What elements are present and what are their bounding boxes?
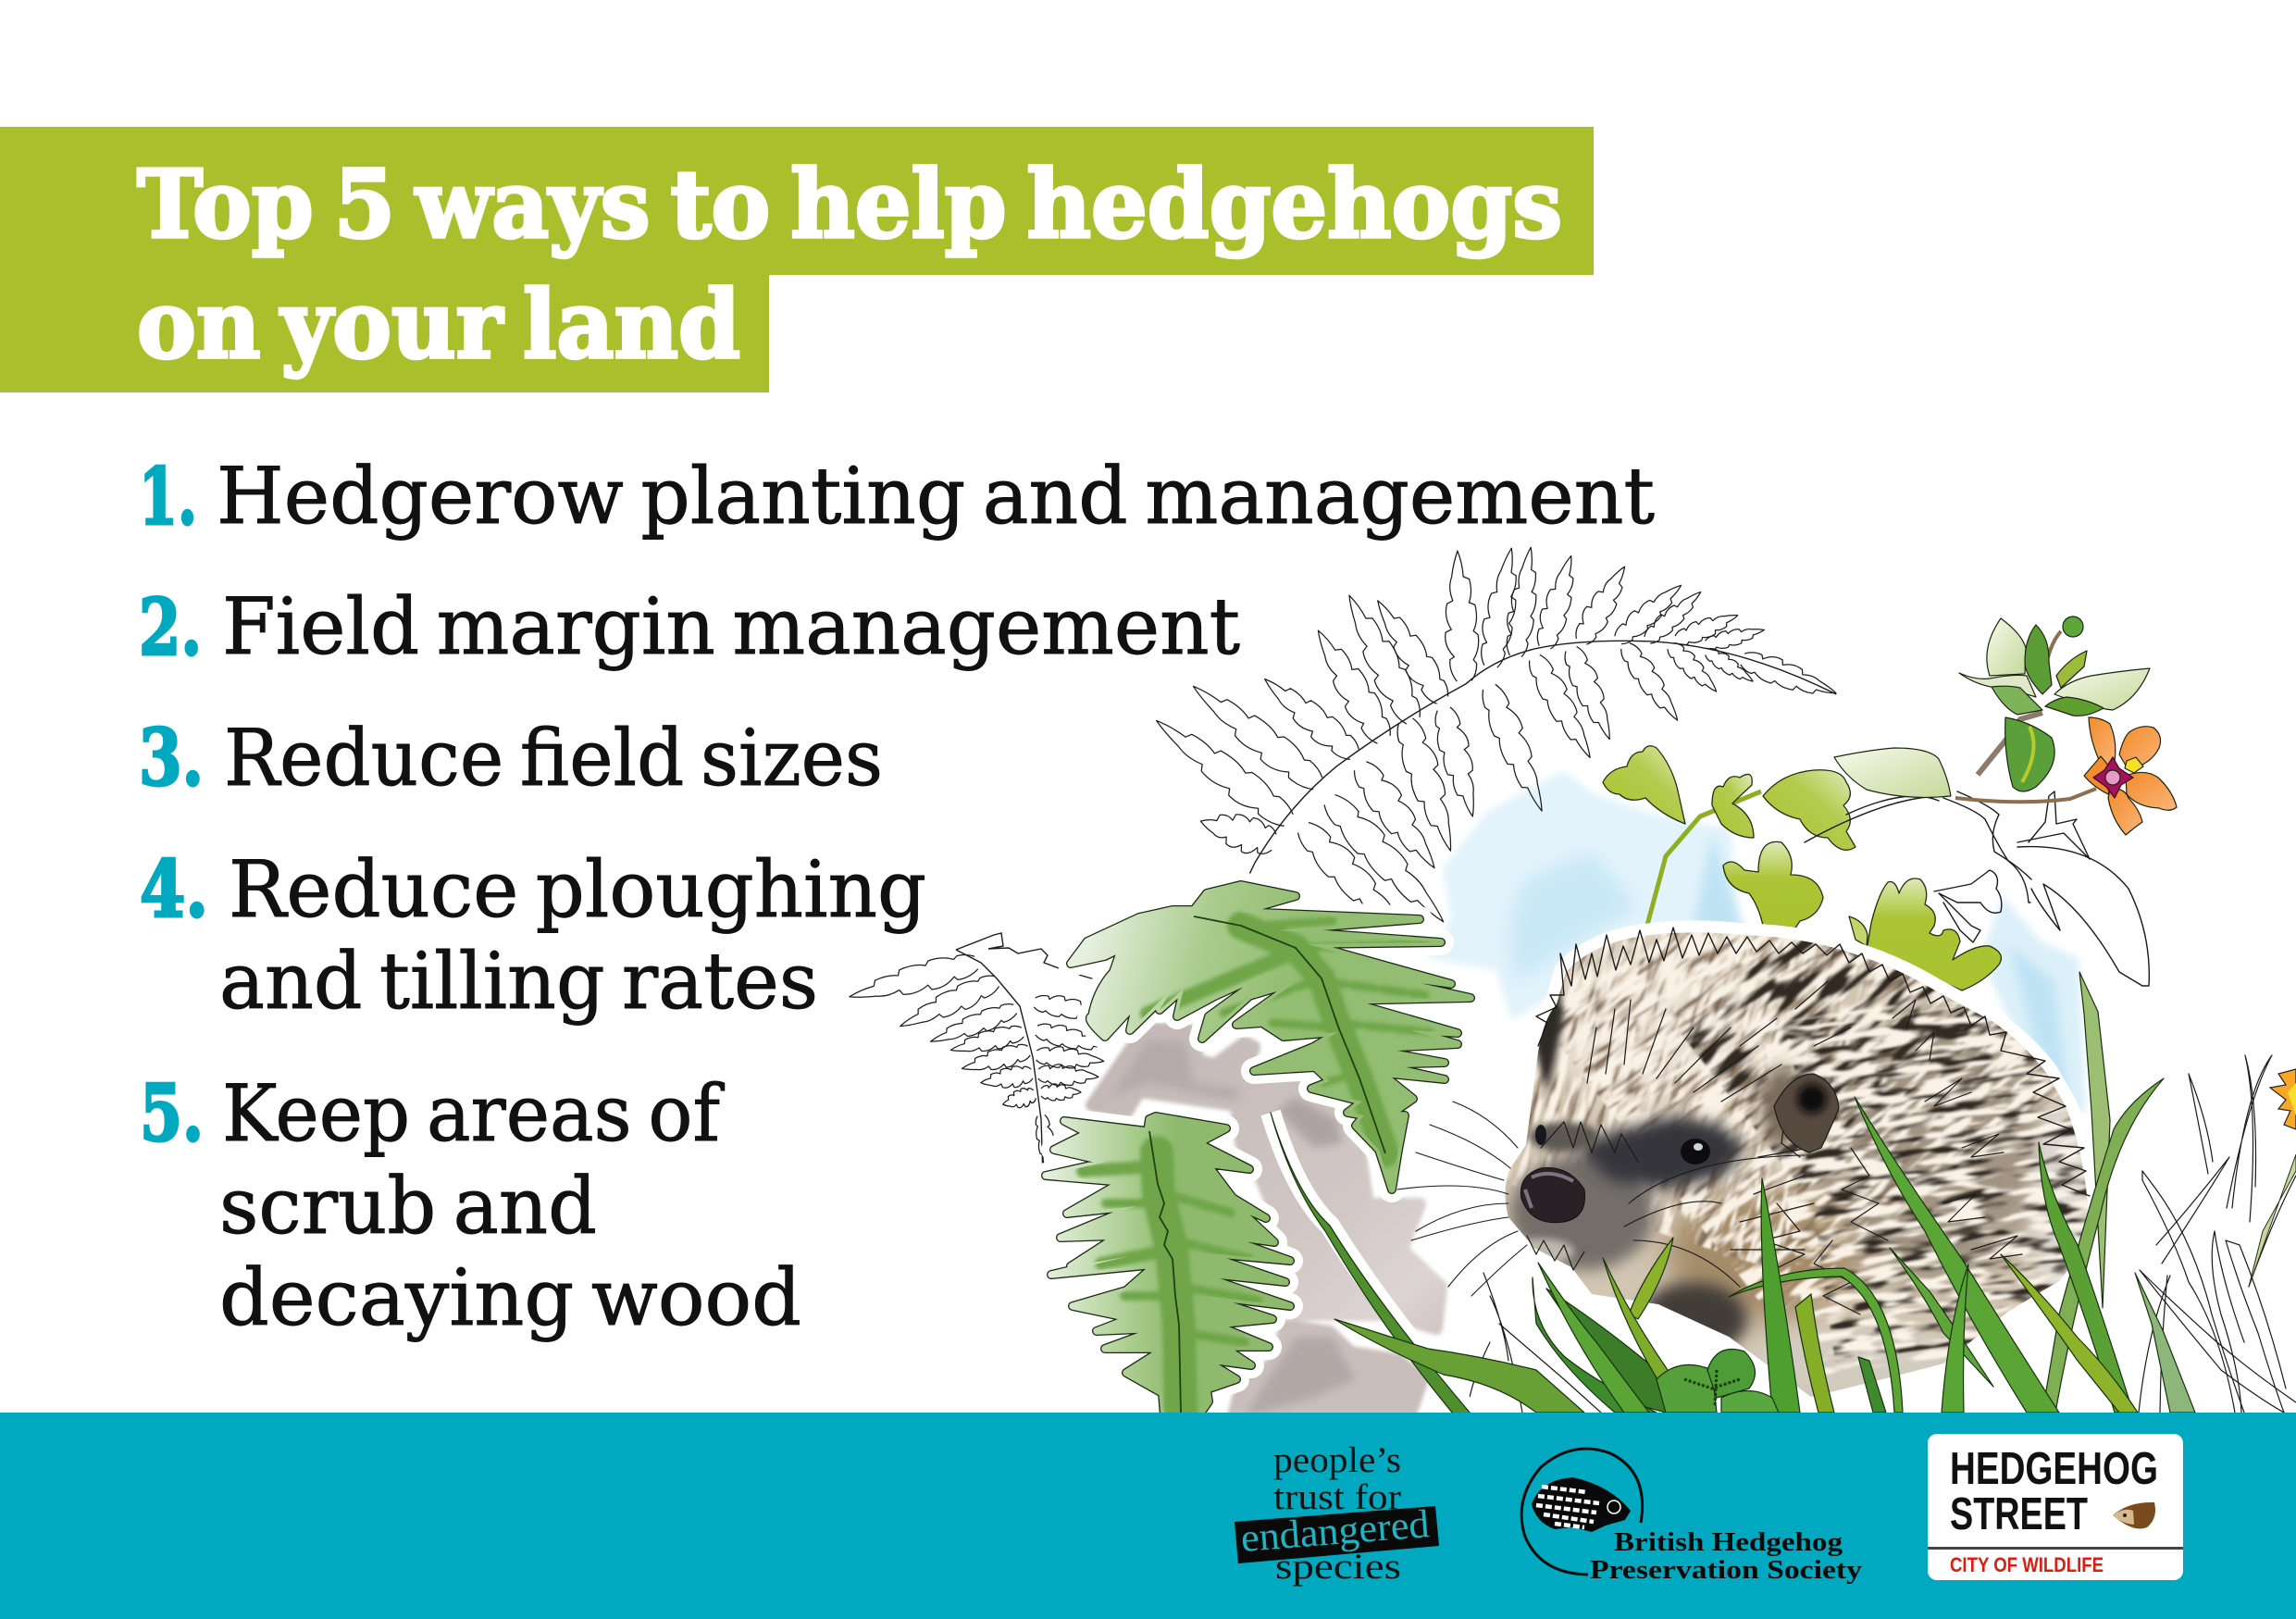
item 3: 3. [139, 712, 204, 803]
leaf pale left [1834, 748, 1951, 797]
item 4: 4. [140, 843, 208, 935]
item 3: Reduce field sizes [224, 713, 883, 803]
dandelion [2249, 1069, 2296, 1287]
logo: people's trust for endangered species: species [1275, 1547, 1401, 1587]
nose [1520, 1167, 1585, 1223]
logo: people's trust for endangered species: endangered [1239, 1502, 1431, 1561]
orange flower [2084, 717, 2177, 835]
numbered list [139, 451, 1655, 1343]
whiskers [1397, 1102, 1805, 1296]
item 4 [140, 843, 926, 1027]
rock shape [1092, 1028, 1441, 1416]
green fern upper [1071, 885, 1471, 1189]
item 4: and tilling rates [219, 936, 818, 1027]
logo: Hedgehog Street [1928, 1434, 2183, 1580]
hedgehog outline spines [1536, 928, 2090, 1196]
clover [1657, 1350, 1779, 1413]
outline fern large [1147, 545, 1841, 948]
outline plant right [1805, 791, 2149, 986]
long grass halo over rock [1271, 1113, 1471, 1414]
item 2: 2. [139, 581, 202, 673]
yellow-green lobed leaves [1603, 746, 2001, 990]
bud [2063, 616, 2083, 637]
small hedgehog icon [2113, 1502, 2155, 1528]
title banner [0, 127, 1594, 392]
logo: Hedgehog Street: HEDGEHOG [1950, 1444, 2158, 1494]
logo: people's trust for endangered species: trust for [1273, 1477, 1401, 1517]
watercolour sky left [1428, 771, 1753, 1021]
thin outline grasses [1467, 1055, 2296, 1413]
footer band [0, 1413, 2296, 1619]
spine strokes [1527, 981, 2022, 1314]
item 5: decaying wood [219, 1252, 801, 1343]
item 5: 5. [140, 1067, 204, 1159]
logo: British Hedgehog Preservation Society: British Hedgehog [1614, 1527, 1843, 1557]
logo: Hedgehog Street: CITY OF WILDLIFE [1950, 1553, 2104, 1576]
item 5: scrub and [219, 1161, 597, 1252]
logo: Hedgehog Street: STREET [1950, 1489, 2088, 1539]
item 1: 1. [139, 451, 197, 542]
outline fern small [846, 933, 1120, 1180]
ear [1774, 1074, 1839, 1152]
hedgehog emblem [1532, 1477, 1631, 1532]
illustration [846, 545, 2296, 1426]
logo: people's trust for endangered species [1235, 1440, 1439, 1587]
flowering sprig [1834, 616, 2177, 835]
logo: people's trust for endangered species: people’s [1273, 1440, 1401, 1480]
item 2: Field margin management [222, 581, 1240, 672]
eye left [1535, 1125, 1546, 1145]
eye right [1681, 1139, 1710, 1164]
grass blades [1271, 972, 2195, 1414]
green fern lower [1046, 1116, 1290, 1416]
item 1: Hedgerow planting and management [217, 451, 1655, 542]
logo: British Hedgehog Preservation Society [1521, 1449, 1863, 1585]
item 5 [140, 1067, 801, 1343]
title line 1: Top 5 ways to help hedgehogs [137, 149, 1562, 259]
spine texture [1507, 932, 2088, 1376]
hedgehog [1397, 920, 2091, 1397]
title line 2: on your land [137, 269, 740, 380]
watercolour sky right [1980, 896, 2086, 1112]
item 5: Keep areas of [222, 1068, 726, 1159]
logo: British Hedgehog Preservation Society: Preservation Society [1590, 1555, 1863, 1585]
item 4: Reduce ploughing [229, 844, 926, 935]
